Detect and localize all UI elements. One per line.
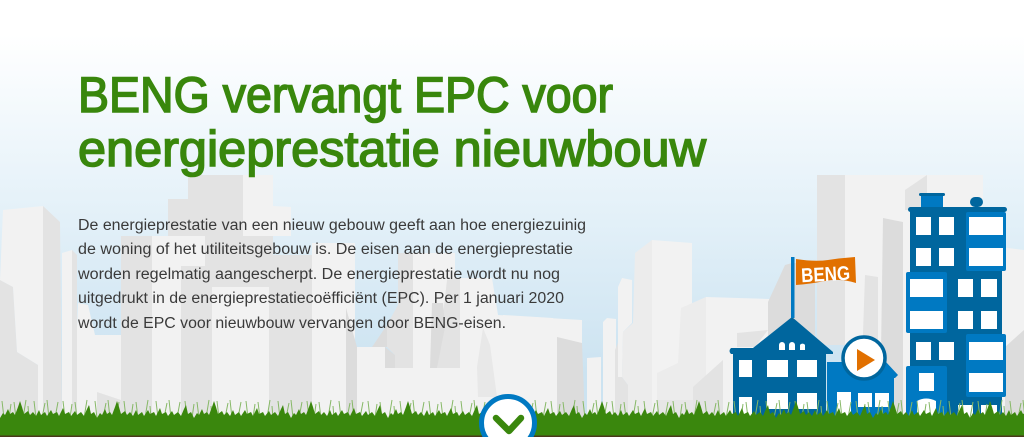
intro text block: wordt de EPC voor nieuwbouw vervangen door BENG-eisen.	[77, 315, 506, 332]
icon: BENG flag on pole: BENG	[801, 263, 851, 287]
icon: scroll-down chevron button	[482, 396, 534, 437]
intro text block: De energieprestatie van een nieuw gebouw geeft aan hoe energiezuinig	[78, 217, 586, 234]
icon: BENG flag on pole	[791, 257, 856, 318]
intro text block: uitgedrukt in de energieprestatiecoëfficiënt (EPC). Per 1 januari 2020	[78, 290, 564, 307]
icon: blue house with gable roof	[730, 317, 833, 420]
icon: blue shop with windows	[827, 362, 898, 420]
intro text block: worden regelmatig aangescherpt. De energieprestatie wordt nu nog	[77, 266, 560, 283]
intro text block	[77, 217, 586, 332]
icon: blue apartment tower	[906, 193, 1007, 420]
title	[78, 67, 707, 177]
grass strip	[0, 398, 1024, 437]
title: BENG vervangt EPC voor	[78, 67, 613, 123]
intro text block: de woning of het utiliteitsgebouw is. De eisen aan de energieprestatie	[78, 241, 573, 258]
icon: play button	[843, 337, 885, 379]
background: grey city skyline	[0, 175, 1024, 420]
title: energieprestatie nieuwbouw	[78, 121, 707, 177]
